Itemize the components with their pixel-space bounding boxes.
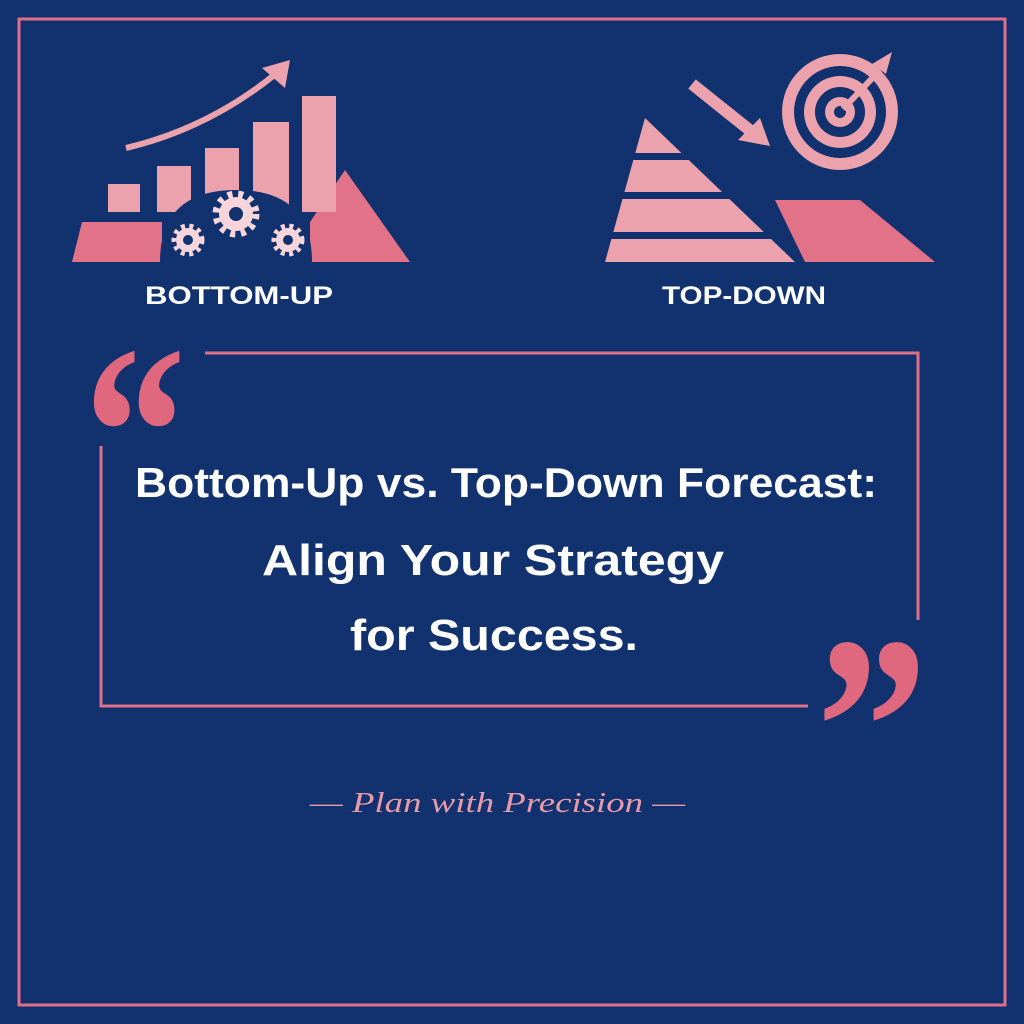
icon: top-down (600, 52, 935, 262)
main quote text: for Success. (350, 611, 638, 660)
icon: bottom-up (72, 60, 410, 262)
open quote mark: “ (84, 295, 186, 572)
main quote text (135, 459, 877, 660)
tagline: — Plan with Precision — (309, 787, 685, 819)
close quote mark: ” (816, 584, 928, 872)
main quote text: Align Your Strategy (262, 536, 725, 585)
label: top-down: TOP-DOWN (662, 282, 826, 310)
main quote text: Bottom-Up vs. Top-Down Forecast: (135, 459, 877, 506)
label: bottom-up: BOTTOM-UP (145, 282, 333, 310)
quote box frame (101, 353, 918, 706)
